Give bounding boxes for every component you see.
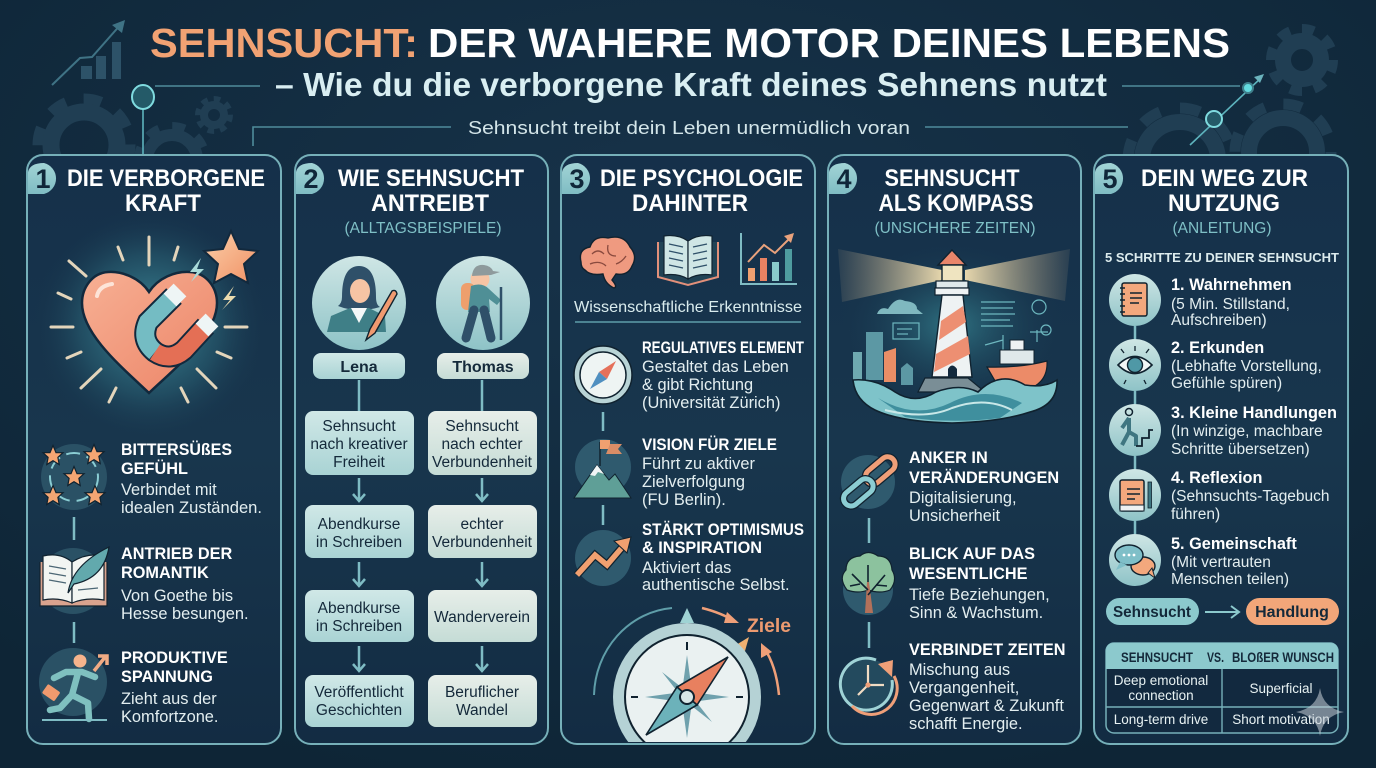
text: bittersuess bbox=[121, 440, 262, 517]
heading 3 bbox=[600, 165, 803, 217]
text: antrieb: ANTRIEB DER bbox=[121, 545, 233, 563]
panel 2: wie Sehnsucht antreibt bbox=[295, 155, 548, 744]
heading 1: KRAFT bbox=[125, 190, 201, 217]
heading 2 bbox=[338, 165, 524, 217]
text: Reflexion: 4. Reflexion bbox=[1171, 469, 1262, 487]
panel 1: die verborgene Kraft bbox=[27, 155, 281, 744]
flow: Lena: Geschichten bbox=[316, 702, 402, 719]
text: Erkunden: Gefühle spüren) bbox=[1171, 375, 1282, 392]
text: spannung: PRODUKTIVE bbox=[121, 649, 228, 667]
number badge 5 bbox=[1095, 163, 1123, 194]
icon: clock bbox=[840, 658, 897, 714]
comparison table bbox=[1106, 643, 1338, 733]
text: regulatives Element: (Universität Zürich) bbox=[642, 394, 780, 412]
text: verbindet Zeiten: Gegenwart & Zukunft bbox=[909, 697, 1064, 715]
icon: speech bubbles bbox=[1109, 534, 1161, 586]
flow: Lena: Abendkurse bbox=[318, 600, 400, 617]
number badge 2 bbox=[296, 163, 324, 194]
icon: notebook bbox=[1109, 274, 1161, 326]
text: spannung bbox=[121, 649, 228, 726]
text: Gemeinschaft bbox=[1171, 535, 1297, 588]
text: Kleine Handlungen bbox=[1171, 404, 1337, 458]
name pill: Lena: Lena bbox=[340, 359, 378, 376]
flow: Thomas: nach echter bbox=[442, 436, 522, 453]
heading 2: WIE SEHNSUCHT bbox=[338, 165, 524, 192]
comparison table: connection bbox=[1128, 688, 1194, 703]
text: regulatives Element: REGULATIVES ELEMENT bbox=[642, 339, 804, 357]
text: Vision: VISION FÜR ZIELE bbox=[642, 435, 777, 454]
heading 1: DIE VERBORGENE bbox=[67, 165, 265, 192]
arrow: Sehnsucht to Handlung bbox=[1205, 606, 1239, 618]
text: verbindet Zeiten: Mischung aus bbox=[909, 661, 1010, 679]
flow: Lena: Sehnsucht bbox=[322, 418, 396, 435]
text: spannung: Komfortzone. bbox=[121, 708, 218, 726]
text: Vision: (FU Berlin). bbox=[642, 491, 726, 509]
text: spannung: Zieht aus der bbox=[121, 690, 217, 708]
decorative background: gears and arrow right bbox=[925, 29, 1333, 212]
heading 5 bbox=[1141, 165, 1308, 217]
sparkle watermark bbox=[1296, 688, 1344, 736]
icon: stairs person bbox=[1109, 404, 1161, 456]
pill: Sehnsucht: Sehnsucht bbox=[1113, 604, 1192, 621]
icon: journal bbox=[1109, 469, 1161, 521]
icon: book and feather bbox=[40, 547, 109, 614]
subheading 2: (ALLTAGSBEISPIELE) bbox=[344, 220, 502, 237]
text: Wahrnehmen bbox=[1171, 276, 1292, 329]
tagline: Sehnsucht treibt dein Leben unermüdlich voran bbox=[468, 117, 910, 138]
text: Kleine Handlungen: Schritte übersetzen) bbox=[1171, 441, 1310, 458]
flow: Thomas: Wandel bbox=[456, 702, 508, 719]
name pill: Thomas bbox=[437, 353, 529, 379]
text: Reflexion: führen) bbox=[1171, 506, 1220, 523]
text: Erkunden: (Lebhafte Vorstellung, bbox=[1171, 358, 1322, 375]
icon: chain bbox=[840, 454, 898, 509]
icon: tree bbox=[842, 552, 895, 615]
text: Wahrnehmen: (5 Min. Stillstand, bbox=[1171, 296, 1290, 313]
text: spannung: SPANNUNG bbox=[121, 668, 213, 686]
number badge 2: 2 bbox=[303, 164, 319, 194]
portrait: Thomas bbox=[436, 256, 530, 350]
heading 5: DEIN WEG ZUR bbox=[1141, 165, 1308, 192]
flow: Thomas: Wanderverein bbox=[434, 609, 530, 626]
pill: Sehnsucht bbox=[1106, 598, 1199, 625]
text: bittersuess: BITTERSÜßES bbox=[121, 440, 232, 459]
text: Anker: ANKER IN bbox=[909, 449, 988, 467]
text: Gemeinschaft: (Mit vertrauten bbox=[1171, 554, 1271, 571]
text: regulatives Element: Gestaltet das Leben bbox=[642, 358, 789, 376]
heading 5: NUTZUNG bbox=[1168, 190, 1280, 217]
number badge 4 bbox=[829, 163, 857, 194]
icon: runner bbox=[39, 648, 107, 720]
flow: Lena: in Schreiben bbox=[316, 618, 402, 635]
number badge 5: 5 bbox=[1102, 164, 1118, 194]
text: Erkunden bbox=[1171, 339, 1322, 392]
text: Reflexion: (Sehnsuchts-Tagebuch bbox=[1171, 488, 1330, 505]
number badge 1 bbox=[28, 163, 56, 194]
heading 4: SEHNSUCHT bbox=[884, 165, 1020, 192]
text: Blick: Tiefe Beziehungen, bbox=[909, 586, 1050, 604]
text: verbindet Zeiten bbox=[909, 641, 1066, 733]
text: verbindet Zeiten: Vergangenheit, bbox=[909, 679, 1019, 697]
flow: Thomas: echter bbox=[460, 516, 504, 533]
icon: small compass bbox=[574, 346, 632, 404]
comparison table: VS. bbox=[1207, 650, 1224, 665]
text: Blick bbox=[909, 545, 1050, 622]
decorative background: chart and gears left bbox=[38, 20, 451, 194]
icon: stars bbox=[41, 444, 107, 510]
label: Ziele: Ziele bbox=[747, 616, 791, 637]
text: Blick: BLICK AUF DAS bbox=[909, 545, 1035, 563]
number badge 1: 1 bbox=[35, 164, 51, 194]
illustration: lighthouse bbox=[837, 240, 1070, 423]
text: Optimismus: & INSPIRATION bbox=[642, 539, 762, 557]
text: Blick: WESENTLICHE bbox=[909, 565, 1028, 583]
text: antrieb: Von Goethe bis bbox=[121, 587, 233, 605]
text: Optimismus: authentische Selbst. bbox=[642, 576, 790, 594]
heading 3: DAHINTER bbox=[632, 190, 748, 217]
text: Anker: Unsicherheit bbox=[909, 507, 1001, 525]
comparison table: BLOßER WUNSCH bbox=[1232, 650, 1334, 665]
icon: growth chart bbox=[741, 233, 797, 284]
flow: Lena bbox=[305, 411, 414, 727]
text: Wahrnehmen: Aufschreiben) bbox=[1171, 312, 1267, 329]
subheading 5: (ANLEITUNG) bbox=[1172, 220, 1272, 237]
icon: open book bbox=[658, 236, 718, 285]
number badge 4: 4 bbox=[836, 164, 852, 194]
panel 4: Sehnsucht als Kompass bbox=[828, 155, 1081, 744]
text: Gemeinschaft: 5. Gemeinschaft bbox=[1171, 535, 1297, 553]
panel 3: die Psychologie dahinter bbox=[561, 155, 815, 768]
text: verbindet Zeiten: VERBINDET ZEITEN bbox=[909, 641, 1066, 659]
text: antrieb bbox=[121, 545, 249, 623]
text: antrieb: Hesse besungen. bbox=[121, 605, 249, 623]
pill: Handlung: Handlung bbox=[1255, 604, 1329, 621]
subheading 4: (UNSICHERE ZEITEN) bbox=[874, 220, 1036, 237]
text: Optimismus: Aktiviert das bbox=[642, 559, 731, 577]
flow: Lena: Freiheit bbox=[333, 454, 386, 471]
flow: Lena: Abendkurse bbox=[318, 516, 400, 533]
icon: eye bbox=[1109, 339, 1161, 391]
subheading: 5 Schritte: 5 SCHRITTE ZU DEINER SEHNSUCHT bbox=[1105, 250, 1339, 265]
text: Optimismus bbox=[642, 521, 804, 594]
text: Vision: Führt zu aktiver bbox=[642, 455, 755, 473]
comparison table: Deep emotional bbox=[1114, 673, 1208, 688]
icon: brain bbox=[580, 237, 635, 288]
illustration: heart with magnet and star bbox=[32, 207, 268, 443]
comparison table: SEHNSUCHT bbox=[1121, 650, 1194, 665]
panel 5: dein Weg zur Nutzung bbox=[1094, 155, 1348, 744]
text: Anker: VERÄNDERUNGEN bbox=[909, 469, 1059, 487]
text: bittersuess: idealen Zuständen. bbox=[121, 499, 262, 517]
flow: Thomas: Verbundenheit bbox=[432, 454, 533, 471]
heading 1 bbox=[67, 165, 265, 217]
icon: rising arrow bbox=[575, 530, 631, 586]
flow: Thomas: Verbundenheit bbox=[432, 534, 533, 551]
heading 2: ANTREIBT bbox=[371, 190, 489, 217]
illustration: large compass bbox=[593, 606, 790, 742]
heading 4 bbox=[878, 165, 1034, 217]
flow: Thomas: Sehnsucht bbox=[445, 418, 519, 435]
text: Blick: Sinn & Wachstum. bbox=[909, 604, 1043, 622]
text: bittersuess: Verbindet mit bbox=[121, 481, 217, 499]
text: Vision: Zielverfolgung bbox=[642, 473, 745, 491]
text: Erkunden: 2. Erkunden bbox=[1171, 339, 1264, 357]
text: Kleine Handlungen: 3. Kleine Handlungen bbox=[1171, 404, 1337, 422]
text: Optimismus: STÄRKT OPTIMISMUS bbox=[642, 521, 804, 539]
icon: mountain with flag bbox=[574, 439, 631, 498]
name pill: Thomas: Thomas bbox=[452, 359, 514, 376]
text: Gemeinschaft: Menschen teilen) bbox=[1171, 571, 1289, 588]
text: bittersuess: GEFÜHL bbox=[121, 459, 188, 478]
text: Vision bbox=[642, 435, 777, 509]
portrait: Lena bbox=[312, 256, 406, 350]
pill: Handlung bbox=[1246, 598, 1339, 625]
text: antrieb: ROMANTIK bbox=[121, 564, 209, 582]
text: Wahrnehmen: 1. Wahrnehmen bbox=[1171, 276, 1292, 294]
flow: Thomas: Beruflicher bbox=[445, 684, 519, 701]
subtitle: – Wie du die verborgene Kraft deines Sehnens nutzt bbox=[275, 66, 1107, 103]
comparison table: Superficial bbox=[1249, 681, 1313, 696]
text: Kleine Handlungen: (In winzige, machbare bbox=[1171, 423, 1323, 440]
text: regulatives Element bbox=[642, 339, 804, 412]
comparison table: Short motivation bbox=[1232, 712, 1330, 727]
text: verbindet Zeiten: schafft Energie. bbox=[909, 715, 1023, 733]
number badge 3: 3 bbox=[569, 164, 585, 194]
text: Anker: Digitalisierung, bbox=[909, 489, 1016, 507]
title: DER WAHERE MOTOR DEINES LEBENS bbox=[428, 20, 1230, 66]
text: Anker bbox=[909, 449, 1059, 525]
heading 4: ALS KOMPASS bbox=[878, 190, 1034, 217]
number badge 3 bbox=[562, 163, 590, 194]
caption: Wissenschaftliche Erkenntnisse: Wissenschaftliche Erkenntnisse bbox=[574, 299, 802, 316]
name pill: Lena bbox=[313, 353, 405, 379]
flow: Lena: nach kreativer bbox=[310, 436, 408, 453]
text: regulatives Element: & gibt Richtung bbox=[642, 376, 753, 394]
heading 3: DIE PSYCHOLOGIE bbox=[600, 165, 803, 192]
text: Reflexion bbox=[1171, 469, 1330, 523]
comparison table: Long-term drive bbox=[1114, 712, 1208, 727]
flow: Lena: in Schreiben bbox=[316, 534, 402, 551]
flow: Thomas bbox=[428, 411, 537, 727]
flow: Lena: Veröffentlicht bbox=[314, 684, 404, 701]
title: SEHNSUCHT: bbox=[150, 20, 418, 66]
